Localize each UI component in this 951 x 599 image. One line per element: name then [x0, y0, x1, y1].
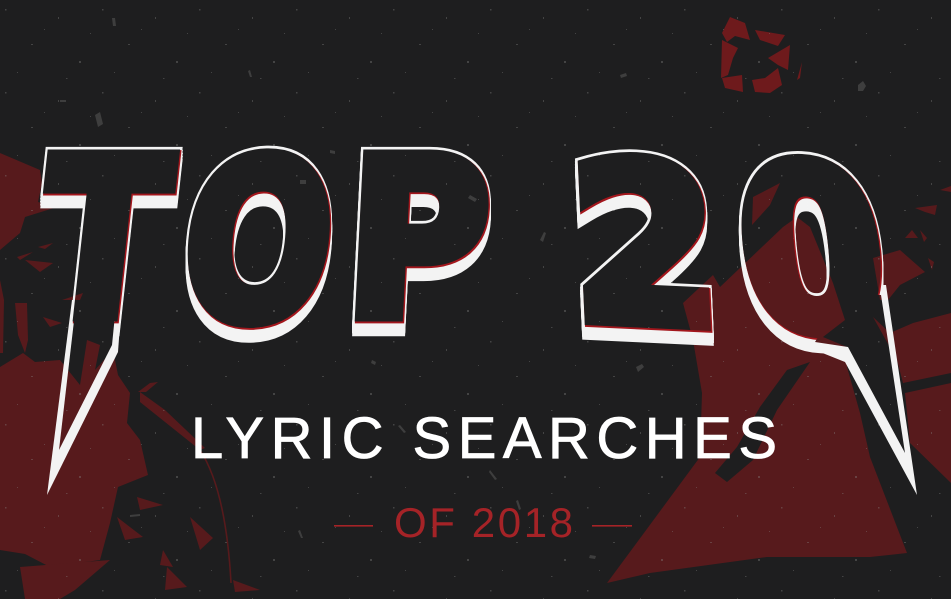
thin red inline edge: T	[29, 115, 180, 368]
top red splatter	[721, 17, 802, 93]
extruded white letters: P	[340, 112, 495, 367]
right red triangle artwork	[607, 183, 951, 583]
thin red inline edge: 0	[727, 118, 898, 387]
extruded white letters: T	[28, 113, 180, 367]
year line: of 2018: OF 2018	[394, 499, 573, 546]
left red grunge artwork	[0, 153, 260, 599]
subtitle: lyric searches: LYRIC SEARCHES	[191, 406, 777, 471]
thin red inline edge: 2	[566, 117, 726, 379]
scratches	[60, 18, 866, 559]
thin red inline edge: P	[341, 114, 496, 368]
thin red arc	[200, 450, 231, 583]
spike on letter T	[47, 300, 120, 495]
extruded white letters	[40, 146, 884, 354]
tail on final zero	[815, 285, 917, 495]
thin red inline edge	[43, 150, 882, 340]
thin red inline edge: O	[174, 113, 344, 373]
extruded white letters: 0	[726, 117, 897, 386]
dark slash through triangle	[715, 362, 810, 482]
extruded white letters: 2	[565, 116, 725, 377]
title: TOP 20	[28, 112, 917, 495]
extruded white letters: O	[174, 112, 344, 372]
